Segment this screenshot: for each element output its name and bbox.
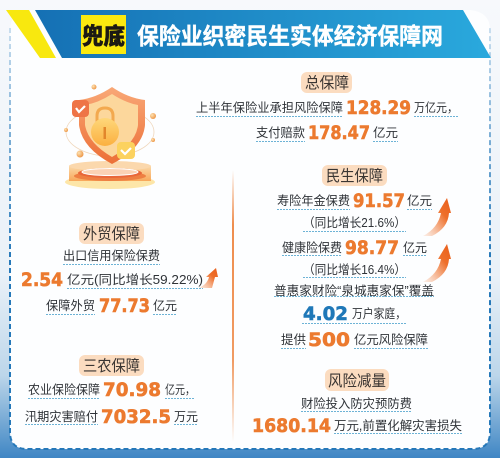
padlock [91, 108, 119, 146]
heading pill: 总保障: 总保障 [305, 74, 349, 92]
line: risk coverage: 上半年保险业承担风险保障 [196, 100, 343, 115]
check badge: orange [72, 100, 89, 117]
line: prevention spend: 万元,前置化解灾害损失 [334, 418, 462, 433]
line: inclusive insurance: 普惠家财险“泉城惠家保”覆盖 [274, 283, 434, 298]
panel: 外贸保障 [21, 223, 218, 317]
line: claims paid [256, 122, 398, 144]
title banner [6, 10, 491, 58]
line: health premium [282, 237, 427, 259]
line: flood claims [25, 406, 198, 428]
centre divider [232, 170, 234, 442]
line: health premium: 98.77 [345, 237, 399, 259]
heading pill: 三农保障: 三农保障 [83, 357, 140, 375]
line: risk provided: 亿元风险保障 [354, 332, 428, 347]
line: households covered: 万户家庭， [352, 306, 406, 321]
arrow: export up [198, 268, 218, 288]
line: risk coverage [196, 97, 458, 119]
line: claims paid: 亿元 [373, 125, 398, 140]
podium [65, 161, 155, 189]
line: annuity premium: 寿险年金保费 [277, 193, 350, 208]
line: trade covered: 77.73 [99, 295, 150, 317]
heading pill: 风险减量: 风险减量 [328, 372, 386, 390]
line: risk provided: 提供 [281, 332, 306, 347]
line: premium growth: 2.54 [21, 269, 63, 291]
line: trade covered: 亿元 [153, 298, 177, 313]
line: premium growth: 亿元(同比增长59.22%) [67, 272, 203, 287]
line: risk coverage: 万亿元， [414, 100, 458, 115]
arrow: annuity up [423, 198, 451, 236]
line: agriculture: 农业保险保障 [28, 382, 100, 397]
line: trade covered: 保障外贸 [46, 298, 95, 313]
icon: shield with padlock on podium [64, 84, 156, 189]
line: risk provided: 500 [308, 329, 350, 351]
line: flood claims: 7032.5 [101, 406, 171, 428]
line: health premium: 亿元 [403, 240, 427, 255]
line: agriculture [28, 379, 195, 401]
decorative balls [64, 84, 156, 158]
shield [79, 87, 145, 164]
line: households covered: 4.02 [303, 303, 348, 325]
line: risk provided [281, 329, 428, 351]
line: health premium: 健康险保费 [282, 240, 342, 255]
line: flood claims: 汛期灾害赔付 [25, 409, 98, 424]
blue title band [35, 10, 491, 58]
line: premium growth [21, 269, 203, 291]
line: prevention spend [252, 415, 462, 437]
line: trade covered [46, 295, 177, 317]
line: claims paid: 支付赔款 [256, 125, 305, 140]
panel: 三农保障 [25, 355, 198, 428]
yellow slanted accent [6, 10, 56, 58]
badge: 兜底: 兜底 [82, 17, 125, 51]
panel: 风险减量 [252, 369, 462, 437]
line: risk coverage: 128.29 [346, 97, 411, 119]
arrow: health up [423, 244, 451, 282]
heading pill: 民生保障: 民生保障 [326, 167, 383, 185]
line: claims paid: 178.47 [308, 122, 370, 144]
line: disaster prevention: 财险投入防灾预防费 [301, 396, 412, 411]
line: annuity premium: 91.57 [353, 190, 405, 212]
line: annuity growth: （同比增长21.6%） [303, 215, 406, 230]
check badge: yellow [117, 142, 135, 159]
line: annuity premium [277, 190, 432, 212]
line: agriculture: 亿元， [165, 382, 195, 397]
title text: 保险业织密民生实体经济保障网 [137, 17, 443, 51]
line: households covered [302, 303, 406, 325]
line: prevention spend: 1680.14 [252, 415, 331, 437]
panel: 民生保障 [274, 165, 451, 351]
panel: 总保障 [196, 72, 458, 144]
line: flood claims: 万元 [174, 410, 198, 424]
line: annuity premium: 亿元 [407, 193, 432, 208]
line: health growth: （同比增长16.4%） [303, 262, 406, 277]
orbit ring [66, 108, 154, 156]
heading pill: 外贸保障: 外贸保障 [83, 225, 140, 243]
line: export credit: 出口信用保险保费 [63, 248, 160, 263]
line: agriculture: 70.98 [103, 379, 161, 401]
